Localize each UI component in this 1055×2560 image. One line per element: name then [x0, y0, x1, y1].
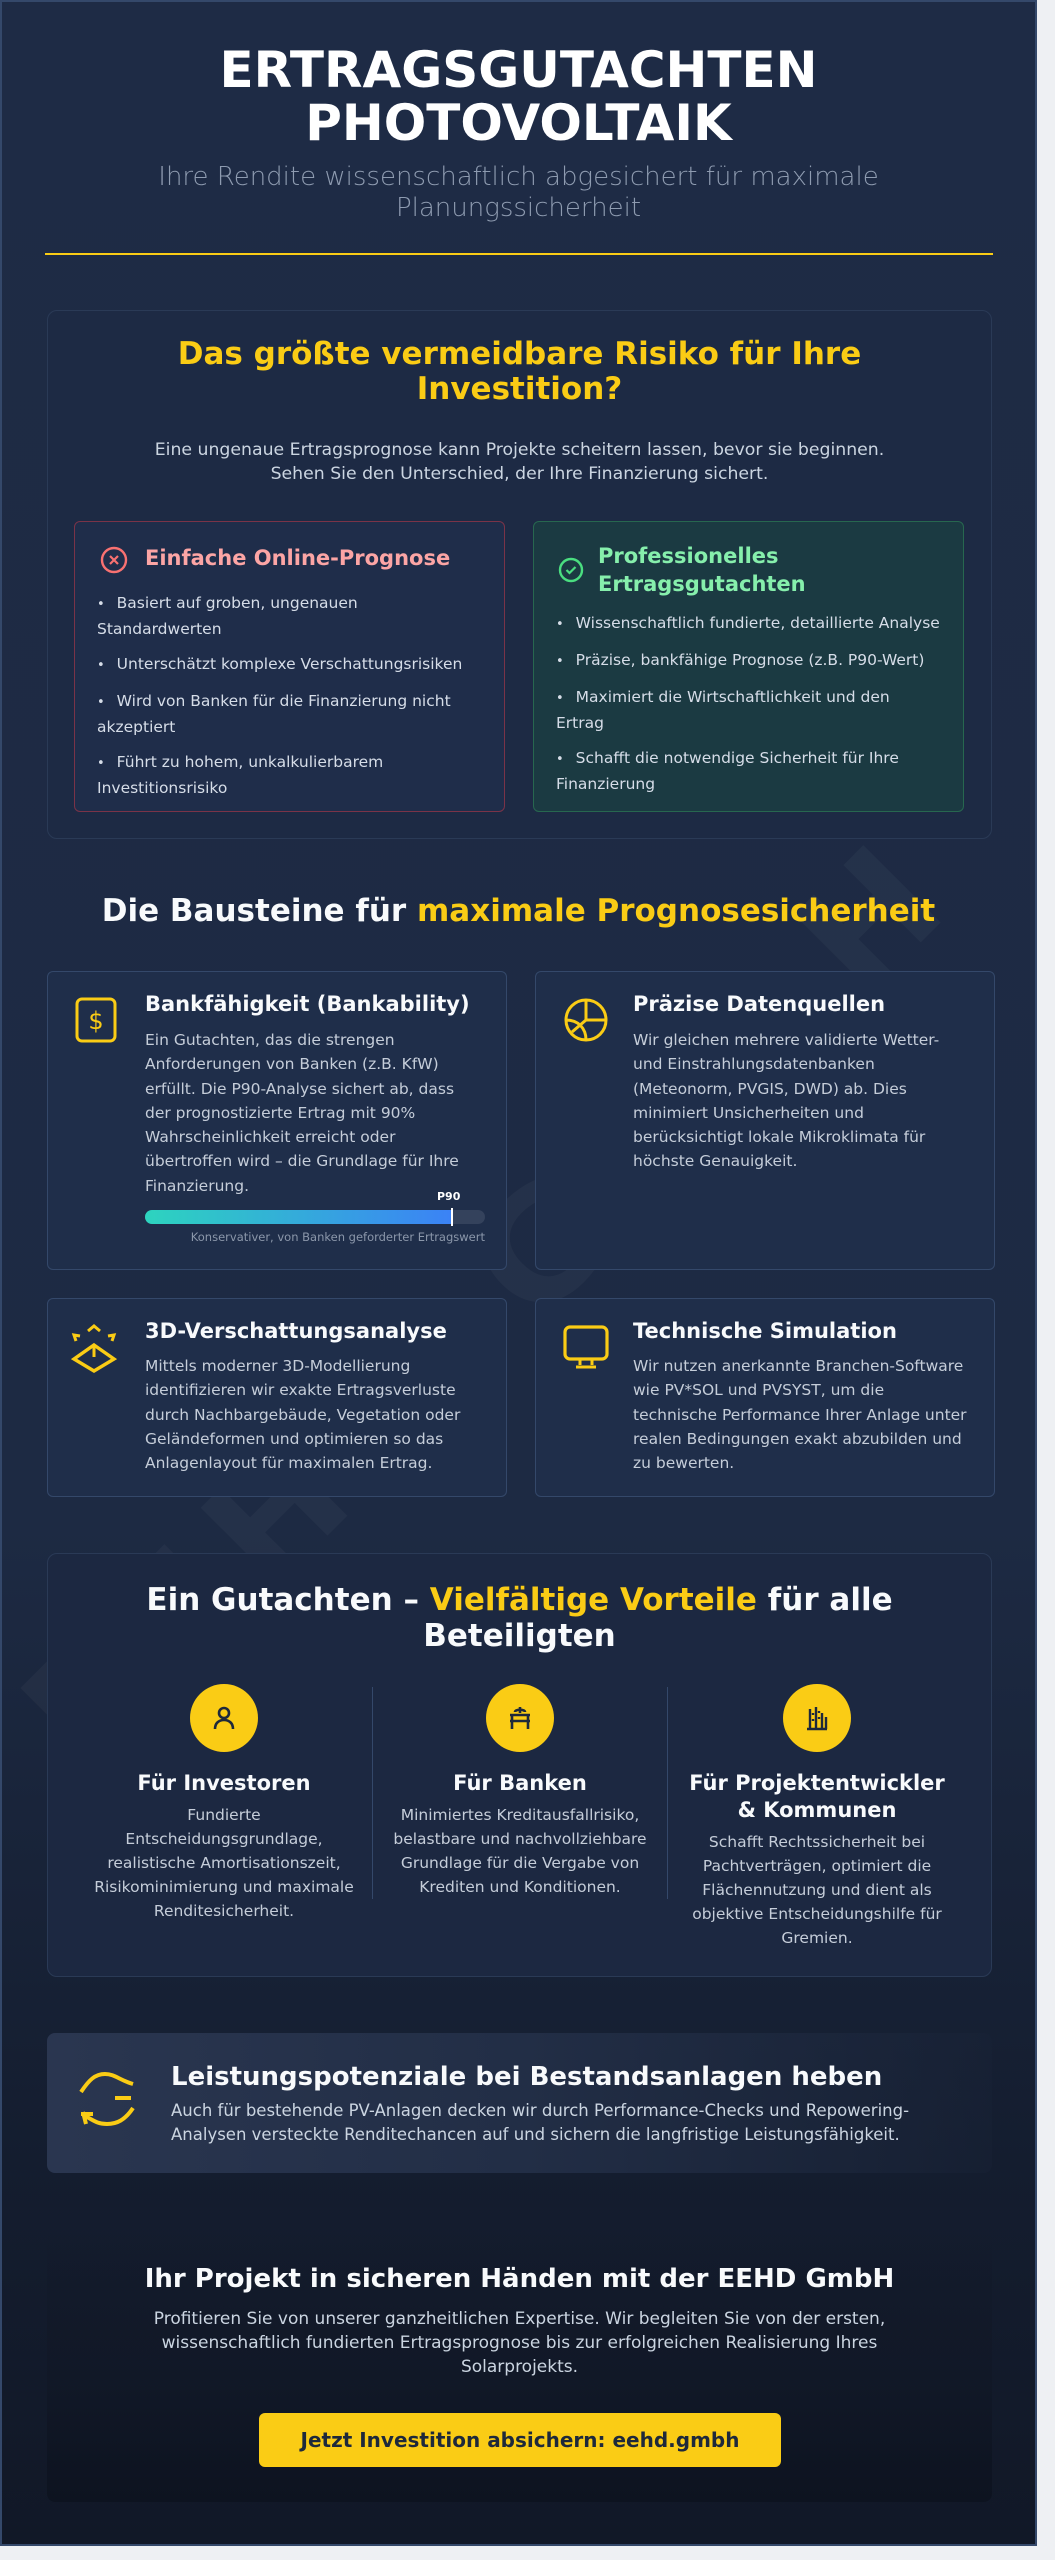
- card: data sources: Präzise Datenquellen: [633, 992, 885, 1016]
- list: online: [97, 594, 462, 797]
- card: shading analysis: 3D-Verschattungsanalyse: [145, 1319, 447, 1343]
- subtitle: Ihre Rendite wissenschaftlich abgesichert für maximale: [158, 162, 879, 192]
- heading: online: Einfache Online-Prognose: [145, 546, 450, 570]
- intro text: Sehen Sie den Unterschied, der Ihre Finanzierung sichert.: [271, 464, 768, 484]
- list: online: Unterschätzt komplexe Verschattungsrisiken: [117, 655, 462, 673]
- heading: benefits: Beteiligten: [423, 1618, 616, 1654]
- list: online: Wird von Banken für die Finanzierung nicht akzeptiert: [97, 692, 451, 736]
- heading: CTA: Ihr Projekt in sicheren Händen mit der EEHD GmbH: [145, 2264, 894, 2294]
- icon: bank: [486, 1684, 554, 1752]
- chart: P90 bar: Konservativer, von Banken geforderter Ertragswert: [191, 1230, 485, 1244]
- panel: risk comparison: [47, 310, 992, 839]
- heading: existing plants: Leistungspotenziale bei Bestandsanlagen heben: [171, 2062, 882, 2092]
- heading: risk: Das größte vermeidbare Risiko für Ihre: [178, 336, 861, 372]
- icon: dollar: [76, 998, 116, 1042]
- icon: pie chart: [564, 998, 608, 1042]
- card: simulation: [535, 1298, 995, 1497]
- card: simulation: Technische Simulation: [633, 1319, 897, 1343]
- heading: professional: Professionelles: [598, 544, 779, 568]
- subtitle: [158, 162, 879, 223]
- watermark: EEHD GmbH: [0, 797, 994, 1801]
- subtitle: Planungssicherheit: [396, 193, 641, 223]
- card: shading analysis: [47, 1298, 507, 1497]
- benefit: banks: [393, 1684, 647, 1896]
- benefit: developers: & Kommunen: [738, 1798, 896, 1822]
- text: CTA: Profitieren Sie von unserer ganzheitlichen Expertise. Wir begleiten Sie von der ersten, wissenschaftlich fundierten Ertragsprognose bis zur erfolgreichen Realisierung Ihres Solarprojekts.: [154, 2309, 885, 2377]
- icon: 3d: [71, 1324, 117, 1373]
- card: shading analysis: Mittels moderner 3D-Modellierung identifizieren wir exakte Ertragsverluste durch Nachbargebäude, Vegetation oder Geländeformen und optimieren so das Anlagenlayout für maximalen Ertrag.: [145, 1357, 460, 1472]
- card: bankability: Ein Gutachten, das die strengen Anforderungen von Banken (z.B. KfW) erfüllt. Die P90-Analyse sichert ab, dass der prognostizierte Ertrag mit 90% Wahrscheinlichkeit erreicht oder übertroffen wird – die Grundlage für Ihre Finanzierung.: [145, 1031, 459, 1195]
- panel: benefits: [47, 1553, 992, 1977]
- icon: dollar: $: [88, 1007, 104, 1035]
- heading: benefits: Ein Gutachten – Vielfältige Vorteile für alle: [146, 1582, 893, 1618]
- banner: existing plants: [47, 2033, 992, 2173]
- list: online: Basiert auf groben, ungenauen Standardwerten: [97, 594, 358, 638]
- benefit: investors: Für Investoren: [137, 1771, 311, 1795]
- card: professional: [533, 521, 964, 812]
- benefit: investors: Fundierte Entscheidungsgrundlage, realistische Amortisationszeit, Risikominimierung und maximale Renditesicherheit.: [94, 1806, 354, 1920]
- icon: check circle: [558, 558, 584, 582]
- intro text: Eine ungenaue Ertragsprognose kann Projekte scheitern lassen, bevor sie beginnen.: [155, 440, 884, 460]
- card: simulation: Wir nutzen anerkannte Branchen-Software wie PV*SOL und PVSYST, um die technische Performance Ihrer Anlage unter realen Bedingungen exakt abzubilden und zu bewerten.: [633, 1357, 967, 1472]
- text: existing plants: Auch für bestehende PV-Anlagen decken wir durch Performance-Checks und Repowering-Analysen versteckte Renditechancen auf und sichern die langfristige Leistungsfähigkeit.: [171, 2101, 909, 2144]
- button: CTA: Jetzt Investition absichern: eehd.gmbh: [300, 2428, 739, 2452]
- panel: call to action: [47, 2232, 992, 2502]
- card: bankability: [47, 971, 507, 1270]
- title: ERTRAGSGUTACHTEN: [220, 41, 817, 99]
- list: professional: Wissenschaftlich fundierte, detaillierte Analyse: [576, 614, 940, 632]
- button: CTA: [259, 2413, 781, 2467]
- icon: x circle: [100, 546, 128, 574]
- heading: benefits: [146, 1582, 893, 1654]
- card: online forecast: [74, 521, 505, 812]
- card: data sources: [535, 971, 995, 1270]
- heading: risk: [178, 336, 861, 407]
- chart: P90 bar: P90: [437, 1190, 460, 1203]
- icon: building: [783, 1684, 851, 1752]
- list: professional: Präzise, bankfähige Prognose (z.B. P90-Wert): [576, 651, 924, 669]
- heading: building blocks: Die Bausteine für maximale Prognosesicherheit: [102, 893, 935, 929]
- list: online: Führt zu hohem, unkalkulierbarem Investitionsrisiko: [97, 753, 383, 797]
- card: data sources: Wir gleichen mehrere validierte Wetter- und Einstrahlungsdatenbanken (Meteonorm, PVGIS, DWD) ab. Dies minimiert Unsicherheiten und berücksichtigt lokale Mikroklimata für höchste Genauigkeit.: [633, 1031, 939, 1170]
- benefit: developers: [689, 1684, 945, 1947]
- icon: monitor: [563, 1325, 609, 1368]
- list: professional: Maximiert die Wirtschaftlichkeit und den Ertrag: [556, 688, 890, 732]
- title: [220, 41, 817, 152]
- chart: P90 bar: [145, 1190, 485, 1244]
- intro text: [155, 440, 884, 484]
- benefit: developers: Für Projektentwickler: [689, 1771, 945, 1795]
- benefit: banks: Minimiertes Kreditausfallrisiko, belastbare und nachvollziehbare Grundlage für die Vergabe von Krediten und Konditionen.: [393, 1806, 647, 1896]
- list: professional: Schafft die notwendige Sicherheit für Ihre Finanzierung: [556, 749, 899, 793]
- heading: risk: Investition?: [417, 371, 622, 407]
- title: PHOTOVOLTAIK: [305, 94, 732, 152]
- benefit: banks: Für Banken: [453, 1771, 587, 1795]
- icon: person: [190, 1684, 258, 1752]
- card: bankability: Bankfähigkeit (Bankability): [145, 992, 470, 1016]
- benefit: investors: [94, 1684, 354, 1920]
- icon: refresh: [79, 2072, 135, 2126]
- heading: professional: Ertragsgutachten: [598, 572, 806, 596]
- benefit: developers: Schafft Rechtssicherheit bei Pachtverträgen, optimiert die Flächennutzung und dient als objektive Entscheidungshilfe für Gremien.: [692, 1833, 942, 1947]
- list: professional: [556, 614, 940, 793]
- heading: professional: [598, 544, 806, 596]
